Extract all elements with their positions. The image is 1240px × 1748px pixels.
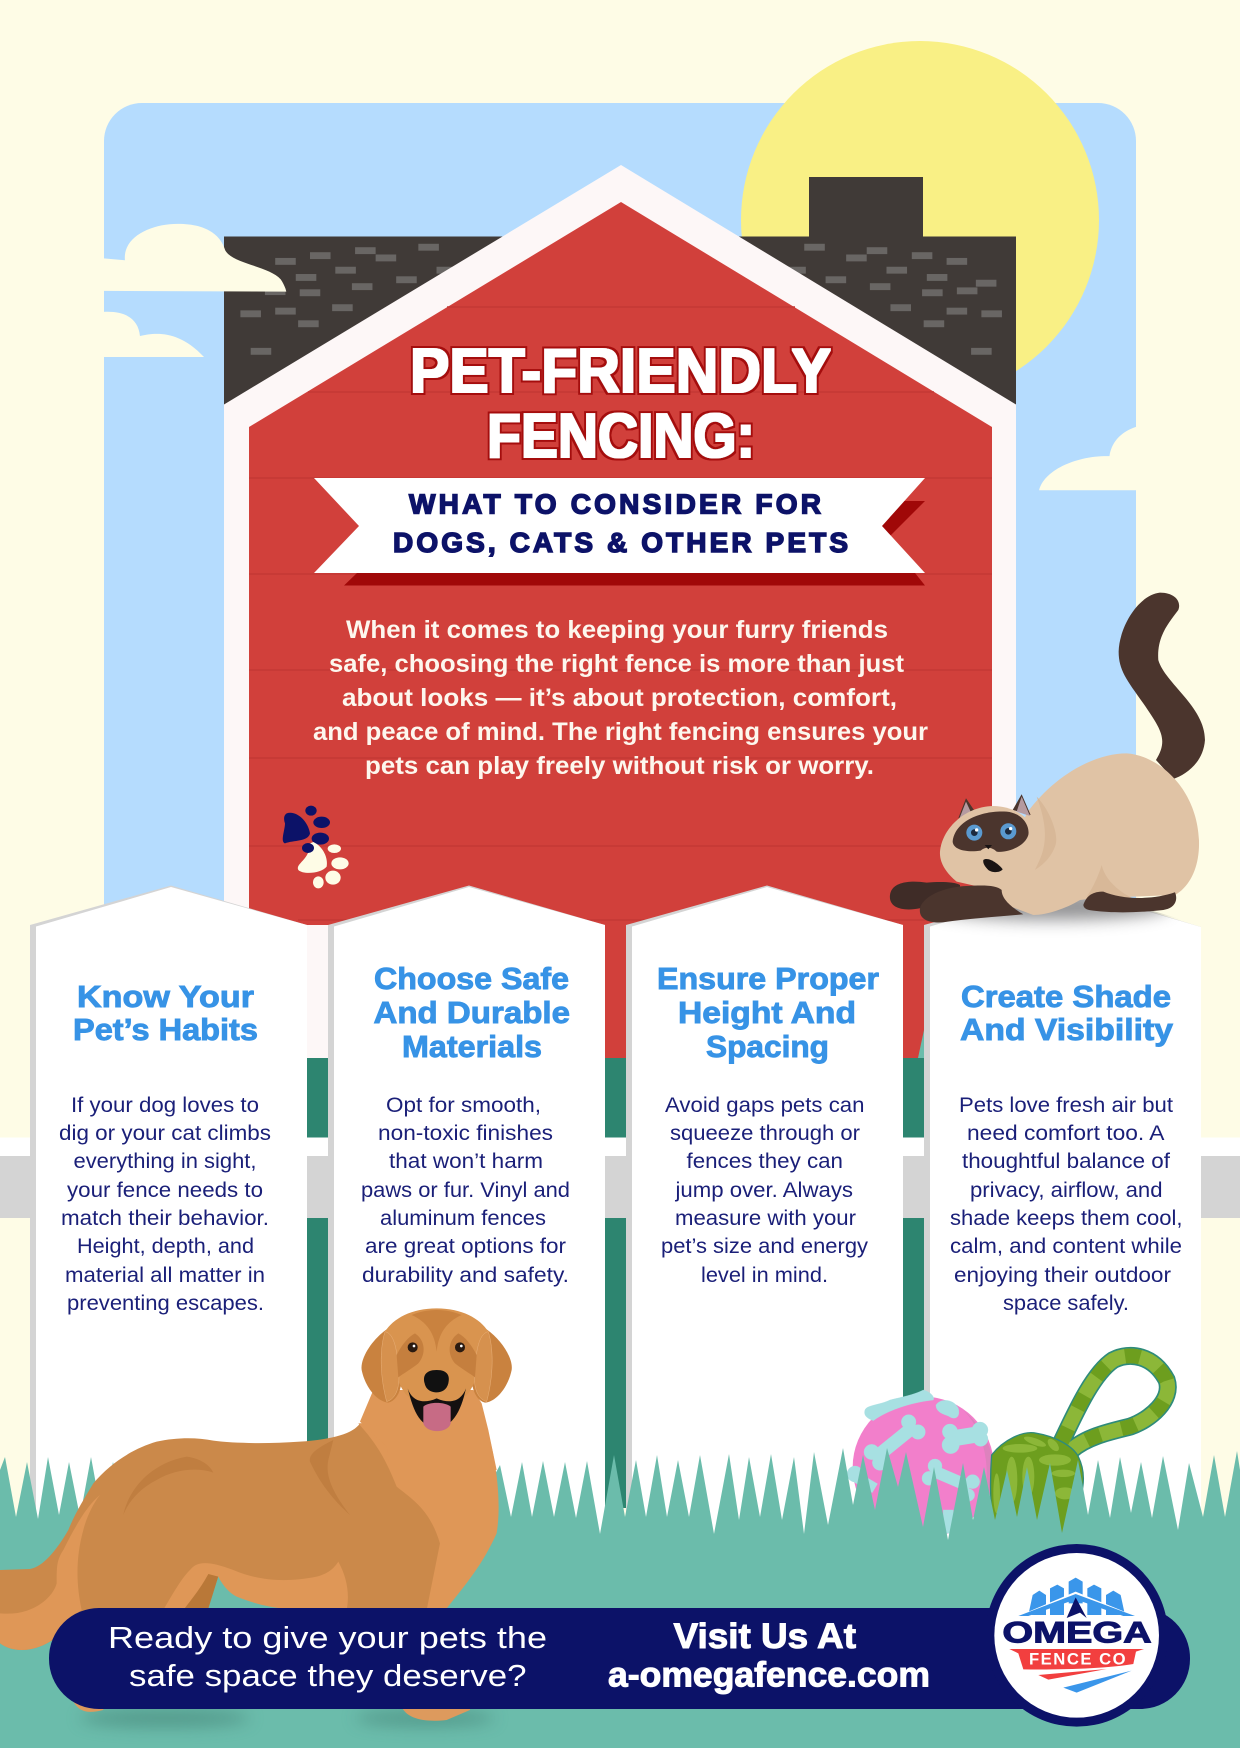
heading: choose safe and durable materials: Choose Safe — [374, 961, 569, 996]
fence gaps and rails — [0, 925, 1240, 1508]
intro paragraph: pets can play freely without risk or worry. — [365, 752, 874, 780]
text: ready to give your pets: Ready to give your pets the — [108, 1620, 547, 1655]
illustration: pink ball with bones — [847, 1390, 999, 1538]
text block: card 3: level in mind. — [701, 1263, 828, 1287]
text block: card 3: fences they can — [686, 1149, 843, 1173]
intro paragraph: and peace of mind. The right fencing ensures your — [313, 718, 928, 746]
fence post: card 3 — [626, 886, 903, 1560]
icon: paw prints — [283, 806, 349, 888]
banner shadows — [80, 1709, 495, 1727]
house — [224, 165, 1016, 1060]
text block: card 4: privacy, airflow, and — [970, 1178, 1162, 1202]
text block: card 4 — [950, 1093, 1182, 1315]
text block: card 4: shade keeps them cool, — [950, 1206, 1182, 1230]
heading: choose safe and durable materials: Materials — [402, 1029, 542, 1064]
text block: card 1: preventing escapes. — [67, 1291, 264, 1315]
title: FENCING: — [487, 402, 755, 471]
sun — [741, 41, 1099, 399]
text block: card 3: Avoid gaps pets can — [665, 1093, 864, 1117]
dog head — [360, 1308, 512, 1470]
clouds — [104, 224, 1136, 490]
ribbon subtitle: DOGS, CATS & OTHER PETS — [393, 527, 848, 558]
logo: omega fence co: FENCE CO — [1029, 1650, 1126, 1669]
illustration: siamese cat — [890, 593, 1205, 922]
text: ready to give your pets: safe space they deserve? — [129, 1658, 526, 1693]
text block: card 4: space safely. — [1003, 1291, 1129, 1315]
text block: card 4: Pets love fresh air but — [959, 1093, 1173, 1117]
logo: omega fence co — [985, 1544, 1168, 1727]
ribbon subtitle — [314, 478, 925, 586]
heading: know your pet's habits: Pet’s Habits — [73, 1012, 258, 1047]
intro paragraph: about looks — it’s about protection, comfort, — [342, 684, 897, 712]
text block: card 3: squeeze through or — [670, 1121, 860, 1145]
logo a mark — [1067, 1597, 1087, 1618]
text block: card 1: material all matter in — [65, 1263, 265, 1287]
text block: card 1: dig or your cat climbs — [59, 1121, 271, 1145]
text block: card 3 — [661, 1093, 868, 1287]
intro paragraph — [313, 616, 928, 780]
dog body — [0, 1420, 499, 1721]
heading: know your pet's habits — [73, 979, 258, 1047]
text block: card 3: pet’s size and energy — [661, 1234, 868, 1258]
call-to-action banner — [49, 1608, 1190, 1709]
text block: card 1: If your dog loves to — [71, 1093, 259, 1117]
text block: card 4: thoughtful balance of — [962, 1149, 1170, 1173]
roof with chimney and shingles — [224, 177, 1016, 416]
fence post: card 2 — [328, 886, 605, 1560]
logo chevron — [1018, 1592, 1135, 1616]
fence post: card 1 — [30, 886, 307, 1560]
logo swoosh — [1063, 1671, 1132, 1693]
heading: ensure proper height and spacing — [657, 961, 879, 1064]
ribbon subtitle: WHAT TO CONSIDER FOR — [409, 488, 821, 520]
text block: card 2: are great options for — [365, 1234, 566, 1258]
sky panel — [104, 103, 1136, 1163]
text block: card 2: durability and safety. — [362, 1263, 569, 1287]
text block: card 1: Height, depth, and — [77, 1234, 254, 1258]
text block: card 4: calm, and content while — [950, 1234, 1182, 1258]
text block: card 1: your fence needs to — [67, 1178, 263, 1202]
heading: ensure proper height and spacing: Height And — [678, 995, 856, 1030]
text block: card 3: measure with your — [675, 1206, 856, 1230]
fence post: card 4 — [924, 886, 1201, 1560]
text: visit us at — [608, 1617, 930, 1694]
logo shield — [1009, 1649, 1144, 1669]
text: visit us at: a-omegafence.com — [608, 1656, 930, 1694]
heading: ensure proper height and spacing: Spacing — [706, 1029, 829, 1064]
heading: create shade and visibility — [960, 979, 1174, 1047]
text block: card 2: Opt for smooth, — [386, 1093, 541, 1117]
text block: card 2: non-toxic finishes — [378, 1121, 553, 1145]
heading: know your pet's habits: Know Your — [77, 979, 254, 1014]
text: visit us at: Visit Us At — [674, 1617, 856, 1656]
intro paragraph: When it comes to keeping your furry friends — [346, 616, 888, 644]
text block: card 4: enjoying their outdoor — [954, 1263, 1171, 1287]
illustration: golden retriever — [0, 1308, 512, 1721]
text block: card 2 — [361, 1093, 570, 1287]
text block: card 1: match their behavior. — [61, 1206, 269, 1230]
text block: card 4: need comfort too. A — [967, 1121, 1165, 1145]
intro paragraph: safe, choosing the right fence is more than just — [329, 650, 905, 678]
illustration: green rope toy — [991, 1356, 1168, 1533]
title — [410, 337, 831, 471]
heading: create shade and visibility: And Visibility — [960, 1012, 1174, 1047]
text block: card 3: jump over. Always — [674, 1178, 853, 1202]
cat shadow on post — [930, 892, 1170, 920]
text: ready to give your pets — [108, 1620, 547, 1693]
text block: card 2: aluminum fences — [380, 1206, 546, 1230]
text block: card 1 — [59, 1093, 271, 1315]
title: PET-FRIENDLY — [410, 337, 831, 406]
grass — [0, 1448, 1240, 1748]
text block: card 1: everything in sight, — [74, 1149, 256, 1173]
text block: card 2: paws or fur. Vinyl and — [361, 1178, 570, 1202]
text block: card 2: that won’t harm — [389, 1149, 543, 1173]
heading: ensure proper height and spacing: Ensure Proper — [657, 961, 879, 996]
heading: choose safe and durable materials: And Durable — [374, 995, 570, 1030]
heading: create shade and visibility: Create Shade — [961, 979, 1171, 1014]
logo wordmark: OMEGA — [1002, 1617, 1152, 1650]
heading: choose safe and durable materials — [374, 961, 570, 1064]
logo pickets — [1028, 1578, 1125, 1615]
